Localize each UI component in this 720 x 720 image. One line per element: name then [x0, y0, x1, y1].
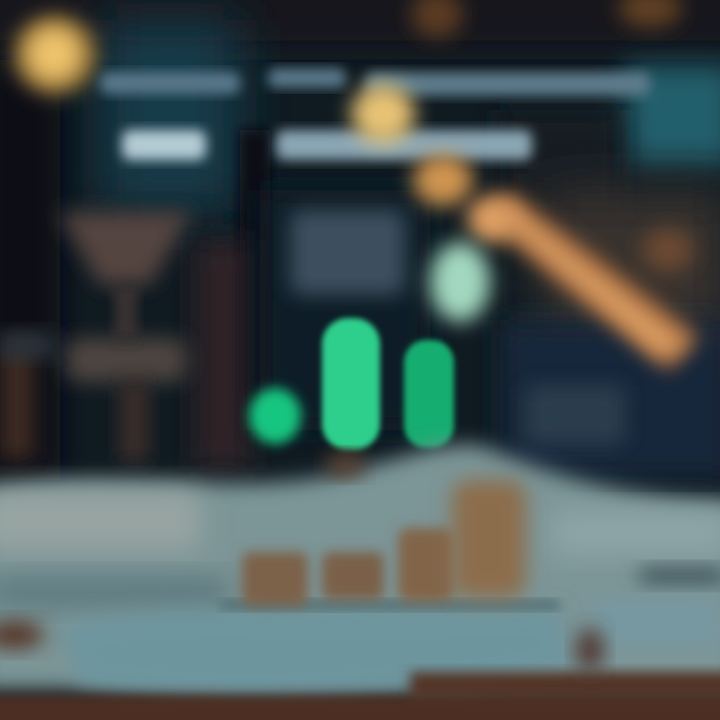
left funnel shapes: [0, 212, 192, 462]
bar chart green: [249, 242, 490, 450]
light beam and bulbs: [351, 84, 700, 372]
wooden table: [0, 621, 720, 720]
table surface paper: [0, 444, 720, 699]
blurred title: [100, 68, 650, 160]
blurred text block center: [290, 210, 405, 295]
blurred text block right: [525, 385, 625, 445]
top lights: [13, 0, 682, 95]
coin stacks: [242, 454, 526, 606]
